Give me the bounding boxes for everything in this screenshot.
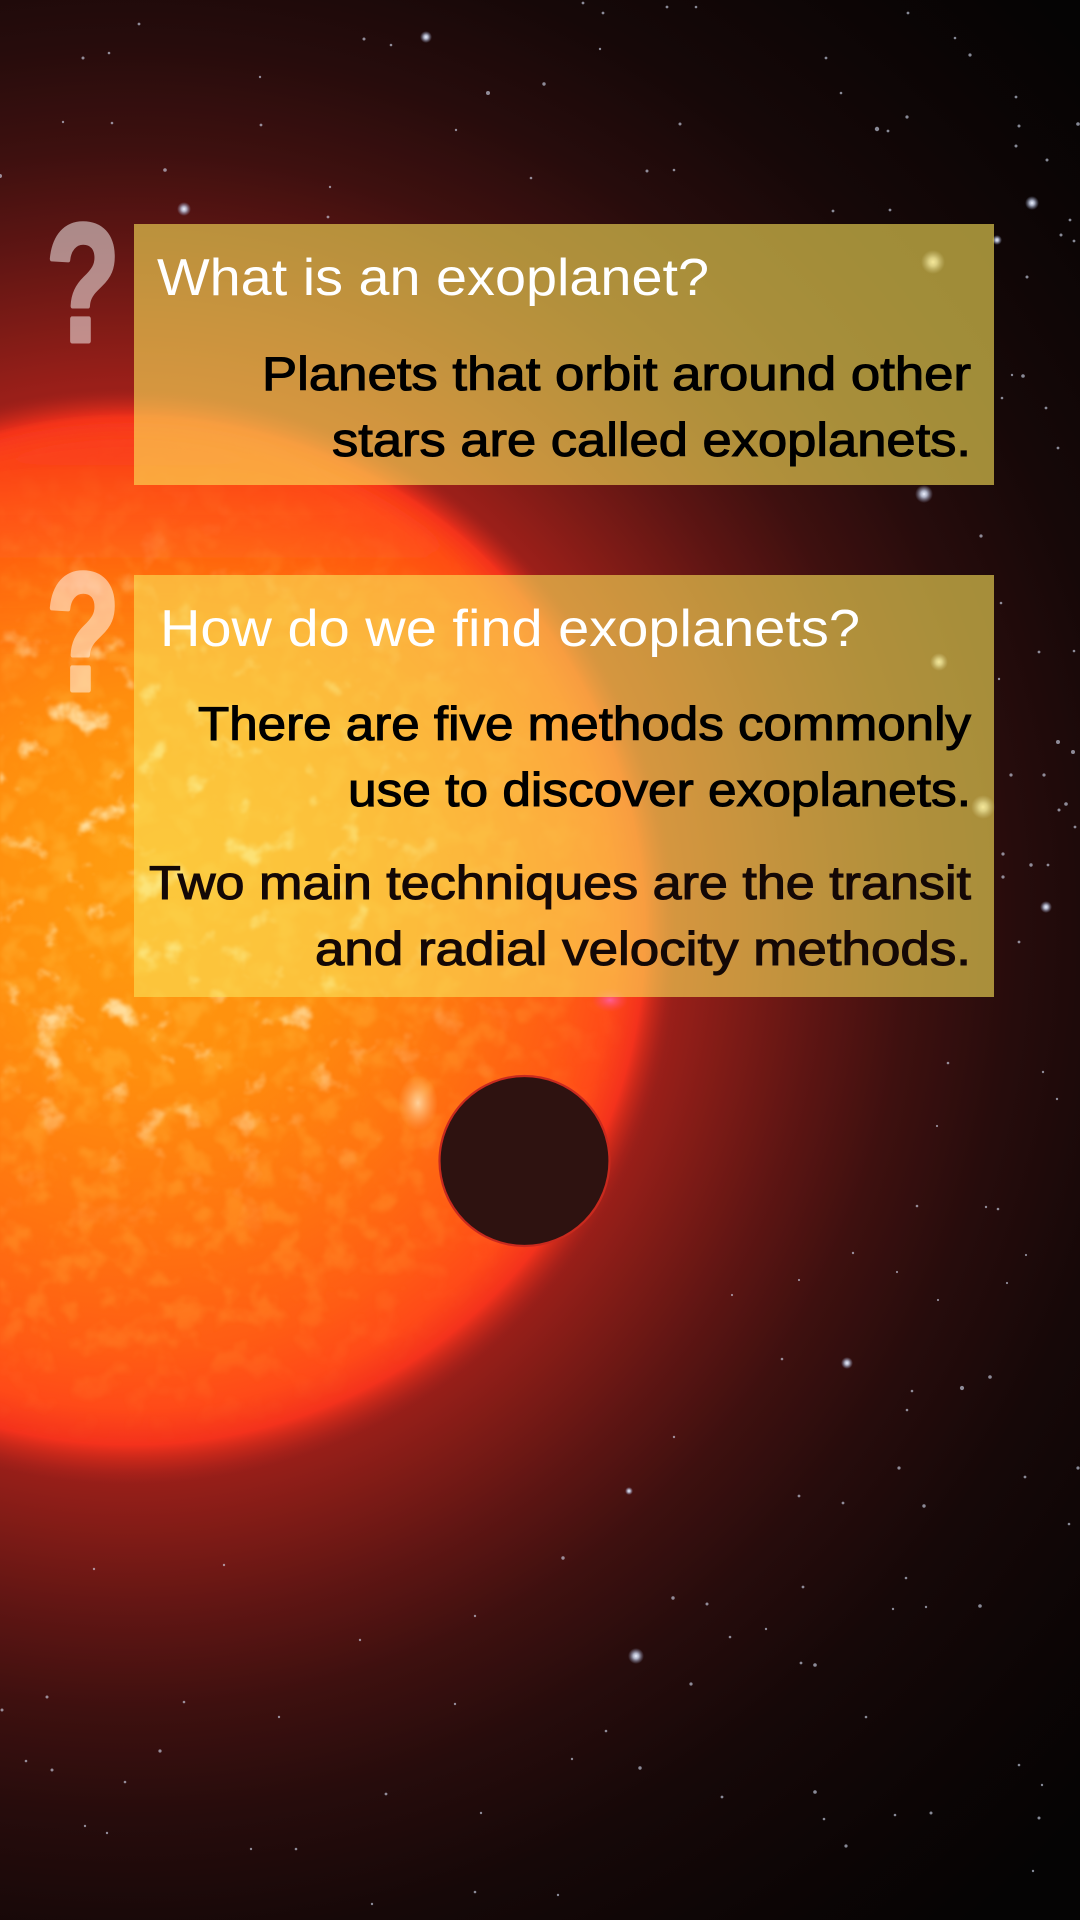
text block: two main techniques: Two main techniques are the transit <box>149 856 971 909</box>
panel: what is an exoplanet <box>134 224 994 485</box>
text block: definition <box>262 347 971 466</box>
text block: two main techniques <box>149 856 971 975</box>
planet <box>440 1076 610 1246</box>
heading: what is an exoplanet: What is an exoplanet? <box>157 249 709 307</box>
panel: how do we find exoplanets <box>134 575 994 997</box>
heading: how do we find exoplanets: How do we find exoplanets? <box>160 600 860 658</box>
text block: definition: Planets that orbit around other <box>262 347 971 400</box>
text block: definition: stars are called exoplanets. <box>332 413 971 466</box>
sun <box>0 388 677 1484</box>
text block: five methods <box>198 697 972 816</box>
text block: two main techniques: and radial velocity methods. <box>315 922 971 975</box>
icon: question mark one: ? <box>46 190 120 378</box>
text block: five methods: There are five methods commonly <box>198 697 972 750</box>
icon: question mark two: ? <box>46 539 120 727</box>
text block: five methods: use to discover exoplanets. <box>348 763 971 816</box>
